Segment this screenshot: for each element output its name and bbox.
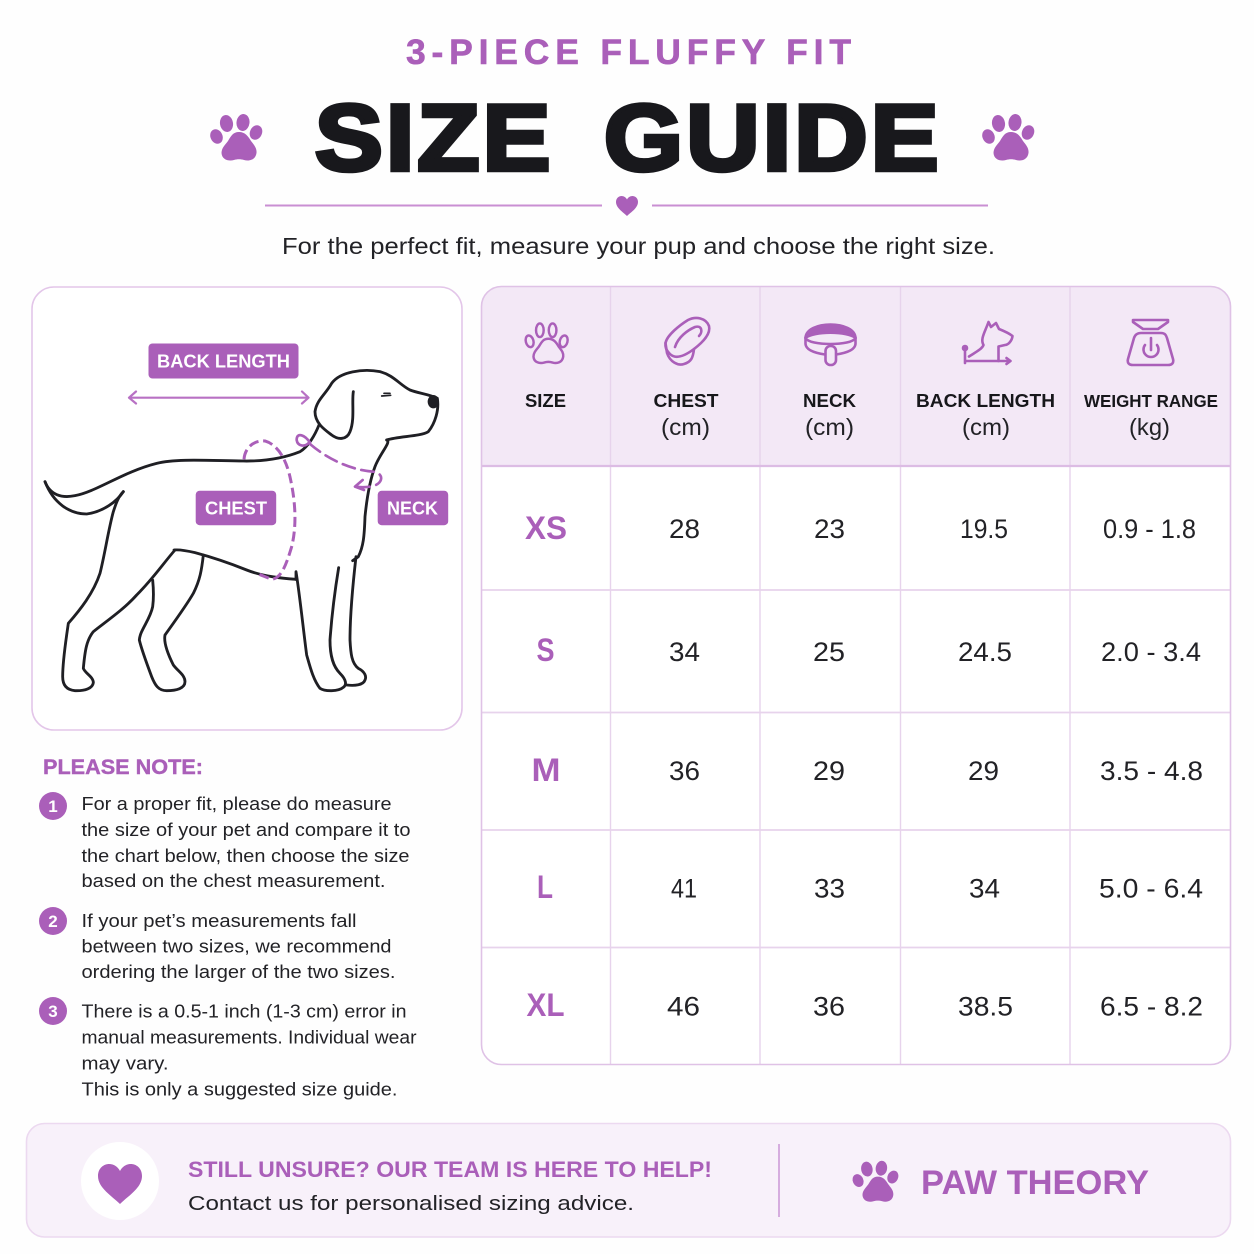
label: back length (148, 344, 298, 378)
row: XL: 46 (667, 992, 700, 1022)
title: size guide (315, 84, 942, 190)
note 3: 3 (48, 1002, 58, 1021)
row: S: 24.5 (958, 637, 1012, 667)
note 2: 2 (48, 912, 58, 931)
row: L: 33 (814, 874, 845, 904)
note 2: If your pet’s measurements fall (82, 910, 356, 931)
note 1: the size of your pet and compare it to (82, 819, 410, 840)
header (208, 32, 1037, 259)
panel: footer banner (26, 1124, 1230, 1237)
column: weight range header: (kg) (1129, 414, 1170, 440)
row: S (536, 632, 1201, 668)
note 1: For a proper fit, please do measure (82, 793, 392, 814)
icon: heart in circle (81, 1142, 159, 1220)
row: L (537, 869, 1203, 905)
help text: STILL UNSURE? OUR TEAM IS HERE TO HELP! (188, 1157, 712, 1182)
label: back length: BACK LENGTH (157, 350, 290, 372)
column: weight range header: WEIGHT RANGE (1084, 391, 1218, 411)
row: XS: XS (525, 510, 567, 546)
row: M (532, 752, 1203, 788)
panel: dog measurement diagram (32, 287, 462, 730)
icon: dog with ruler (963, 322, 1012, 364)
chest dashed measure (244, 441, 295, 579)
column: size header: SIZE (525, 390, 566, 411)
row: M: M (532, 752, 560, 788)
label: chest: CHEST (205, 498, 268, 518)
brand: paw theory (851, 1160, 1149, 1202)
column: chest header (654, 318, 719, 440)
note 3: This is only a suggested size guide. (82, 1078, 398, 1100)
column: back length header: BACK LENGTH (916, 390, 1055, 411)
column: neck header: (cm) (805, 414, 854, 440)
row: L: L (537, 869, 553, 905)
row: XL: 36 (813, 992, 845, 1022)
row: XS: 23 (814, 514, 845, 544)
note 3: manual measurements. Individual wear (82, 1026, 417, 1048)
tagline: For the perfect fit, measure your pup and choose the right size. (282, 233, 995, 259)
dog outline (45, 370, 439, 691)
label: neck: NECK (387, 498, 439, 518)
help text: Contact us for personalised sizing advice. (188, 1192, 634, 1215)
arrow: back length (129, 392, 308, 404)
row: M: 29 (968, 756, 999, 786)
row: XS (525, 510, 1196, 546)
icon: right paw (980, 113, 1037, 161)
brand: paw theory: PAW THEORY (921, 1164, 1149, 1202)
row: XL: 6.5 - 8.2 (1100, 992, 1203, 1022)
heading: please note: PLEASE NOTE: (43, 755, 203, 779)
title: size guide: SIZE (315, 84, 554, 190)
note 2 (39, 907, 396, 982)
column: neck header (803, 324, 857, 440)
row: L: 34 (969, 874, 1000, 904)
note 3: may vary. (82, 1052, 168, 1074)
row: XS: 0.9 - 1.8 (1103, 514, 1196, 544)
note 1 (39, 792, 410, 891)
row: L: 41 (671, 874, 697, 904)
icon: left paw (208, 113, 265, 161)
label: chest (196, 491, 276, 525)
notes (39, 755, 417, 1100)
label: neck (378, 491, 448, 525)
column: weight range header (1084, 320, 1218, 440)
row: XS: 28 (669, 514, 700, 544)
column: size header (524, 323, 569, 411)
column: back length header (916, 322, 1055, 440)
subtitle: 3-piece fluffy fit: 3-PIECE FLUFFY FIT (406, 32, 851, 72)
note 2: between two sizes, we recommend (82, 936, 392, 956)
note 1: the chart below, then choose the size (82, 845, 410, 866)
column: chest header: CHEST (654, 390, 719, 411)
row: M: 36 (669, 756, 700, 786)
row: S: S (536, 632, 554, 668)
row: S: 25 (813, 637, 845, 667)
panel: size table (482, 286, 1230, 1064)
neck dashed measure (297, 435, 381, 490)
row: L: 5.0 - 6.4 (1099, 874, 1203, 904)
row: XL: 38.5 (958, 992, 1013, 1022)
note 1: 1 (48, 797, 58, 816)
row: XS: 19.5 (960, 514, 1008, 544)
icon: chest harness (665, 318, 709, 365)
note 3 (39, 997, 417, 1100)
column: back length header: (cm) (962, 414, 1010, 440)
row: XL (526, 987, 1203, 1023)
note 1: based on the chest measurement. (82, 870, 386, 891)
row: M: 29 (813, 756, 845, 786)
column: neck header: NECK (803, 390, 857, 411)
icon: kitchen scale (1128, 320, 1173, 365)
icon: paw outline (524, 323, 569, 363)
row: M: 3.5 - 4.8 (1100, 756, 1203, 786)
help text (188, 1157, 712, 1215)
column: chest header: (cm) (661, 414, 710, 440)
row: S: 34 (669, 637, 700, 667)
icon: divider heart (616, 196, 638, 216)
icon: collar (806, 324, 856, 365)
title: size guide: GUIDE (604, 84, 942, 190)
row: XL: XL (526, 987, 564, 1023)
note 3: There is a 0.5-1 inch (1-3 cm) error in (82, 1000, 406, 1022)
row: S: 2.0 - 3.4 (1101, 637, 1201, 667)
note 2: ordering the larger of the two sizes. (82, 961, 396, 982)
